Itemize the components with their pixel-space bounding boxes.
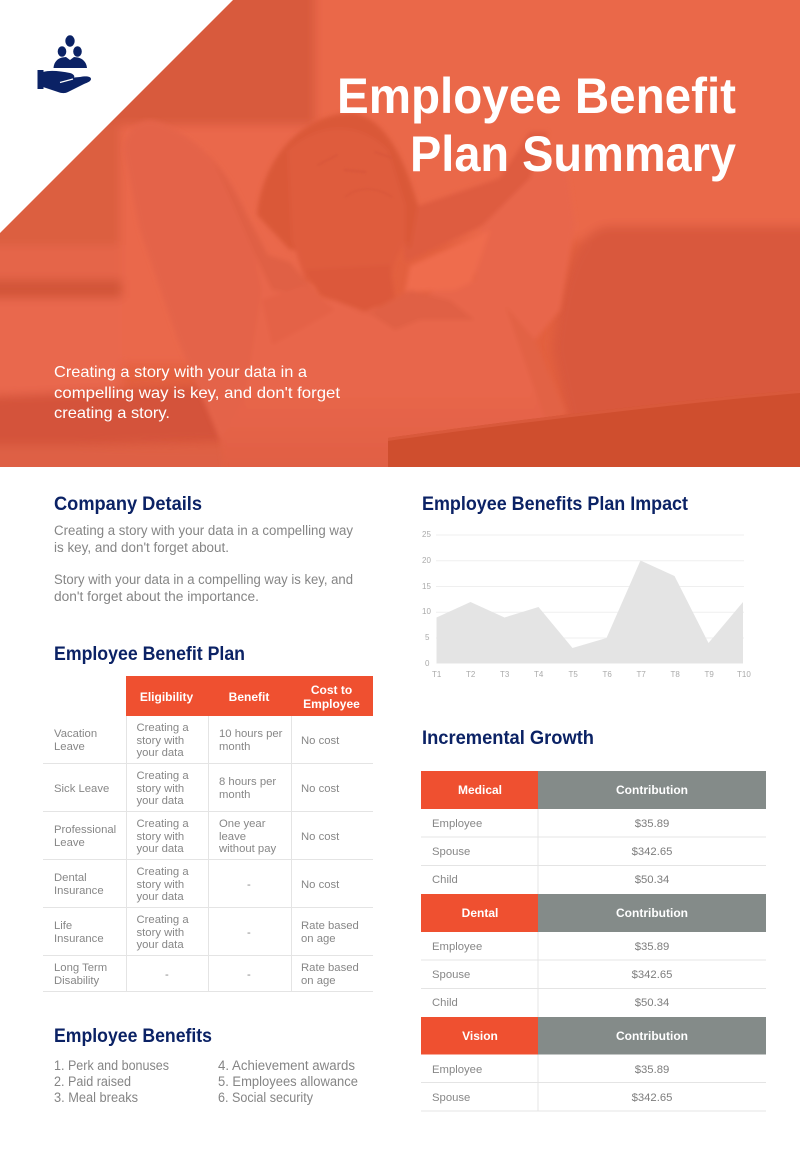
section: dental: Employee <box>432 941 482 953</box>
row: long term disability: Long Term <box>54 962 107 974</box>
section: vision: $35.89 <box>635 1064 669 1076</box>
company details text <box>54 523 353 604</box>
company details text: is key, and don't forget about. <box>54 540 229 555</box>
row: dental insurance: Creating a <box>136 866 189 878</box>
section: medical <box>421 771 766 886</box>
hero photo panel <box>0 0 800 490</box>
area chart: 15 <box>422 582 431 591</box>
row: vacation leave: No cost <box>301 735 340 747</box>
row: dental insurance: story with <box>136 879 184 891</box>
section: vision: $342.65 <box>632 1092 672 1104</box>
area chart: 0 <box>425 659 430 668</box>
section: medical: Medical <box>458 783 502 797</box>
row: professional leave: Creating a <box>136 818 189 830</box>
face <box>298 222 400 281</box>
area chart: T4 <box>534 670 544 679</box>
table: benefit plan: Employee <box>303 697 360 711</box>
benefits list <box>54 1058 358 1105</box>
row: life insurance: Rate based <box>301 920 359 932</box>
row: sick leave: Creating a <box>136 770 189 782</box>
row: professional leave <box>54 818 340 855</box>
benefits list: 3. Meal breaks <box>54 1090 138 1105</box>
area chart: T9 <box>704 670 714 679</box>
section: dental <box>421 894 766 1009</box>
table: benefit plan <box>43 676 373 992</box>
row: sick leave: your data <box>136 795 184 807</box>
area chart: T10 <box>737 670 751 679</box>
area chart: T3 <box>500 670 510 679</box>
intro text: creating a story. <box>54 405 170 422</box>
area chart: 10 <box>422 607 431 616</box>
area chart: T6 <box>602 670 612 679</box>
row: life insurance: Insurance <box>54 933 104 945</box>
row: professional leave: Leave <box>54 837 85 849</box>
area chart: 20 <box>422 556 431 565</box>
benefits list: 6. Social security <box>218 1090 313 1105</box>
heading: plan impact: Employee Benefits Plan Impact <box>422 494 689 515</box>
row: professional leave: leave <box>219 831 246 843</box>
row: sick leave: No cost <box>301 783 340 795</box>
sweater torso and arms <box>222 240 570 447</box>
table: benefit plan: Benefit <box>229 690 269 704</box>
table: benefit plan: Eligibility <box>140 690 193 704</box>
row: long term disability: - <box>165 969 169 981</box>
row: professional leave: your data <box>136 843 184 855</box>
section: medical: Child <box>432 874 458 886</box>
row: dental insurance: Insurance <box>54 885 104 897</box>
row: dental insurance: No cost <box>301 879 340 891</box>
benefits list: 2. Paid raised <box>54 1074 131 1089</box>
heading: employee benefits: Employee Benefits <box>54 1026 212 1047</box>
section: medical: $50.34 <box>635 874 669 886</box>
area chart: T7 <box>636 670 646 679</box>
row: professional leave: No cost <box>301 831 340 843</box>
row: sick leave: story with <box>136 783 184 795</box>
row: life insurance: - <box>247 927 251 939</box>
row: long term disability: - <box>247 969 251 981</box>
intro text: Creating a story with your data in a <box>54 364 307 381</box>
intro text <box>54 364 341 422</box>
row: sick leave: Sick Leave <box>54 783 109 795</box>
row: vacation leave: month <box>219 741 250 753</box>
area chart <box>422 530 751 679</box>
row: vacation leave <box>54 722 340 759</box>
row: long term disability: on age <box>301 975 336 987</box>
section: dental: Child <box>432 997 458 1009</box>
heading: incremental growth: Incremental Growth <box>422 728 594 749</box>
row: long term disability: Disability <box>54 975 100 987</box>
neck <box>320 292 371 312</box>
row: life insurance: Creating a <box>136 914 189 926</box>
table: incremental growth <box>421 771 766 1111</box>
area chart: T1 <box>432 670 442 679</box>
row: sick leave <box>54 770 340 807</box>
row: life insurance: Life <box>54 920 72 932</box>
row: sick leave: month <box>219 789 250 801</box>
benefits list: 1. Perk and bonuses <box>54 1058 169 1073</box>
heading: employee benefit plan: Employee Benefit Plan <box>54 644 245 665</box>
section: vision: Contribution <box>616 1029 688 1043</box>
row: vacation leave: Vacation <box>54 728 97 740</box>
row: long term disability <box>54 962 359 987</box>
section: medical: Contribution <box>616 783 688 797</box>
row: professional leave: One year <box>219 818 266 830</box>
collar <box>401 299 430 310</box>
row: long term disability: Rate based <box>301 962 359 974</box>
section: dental: $50.34 <box>635 997 669 1009</box>
section: medical: $35.89 <box>635 818 669 830</box>
intro text: compelling way is key, and don't forget <box>54 385 341 402</box>
section: dental: Contribution <box>616 906 688 920</box>
area chart: T2 <box>466 670 476 679</box>
row: professional leave: Professional <box>54 824 116 836</box>
company details text: Creating a story with your data in a compelling way <box>54 523 353 538</box>
row: life insurance <box>54 914 359 951</box>
white corner triangle <box>0 0 233 233</box>
section: vision: Vision <box>462 1029 498 1043</box>
forearm behind head <box>252 231 303 289</box>
section: vision: Spouse <box>432 1092 470 1104</box>
row: dental insurance <box>54 866 340 903</box>
row: vacation leave: Creating a <box>136 722 189 734</box>
title <box>337 68 736 182</box>
row: dental insurance: - <box>247 879 251 891</box>
row: dental insurance: your data <box>136 891 184 903</box>
row: professional leave: story with <box>136 831 184 843</box>
section: dental: Dental <box>462 906 498 920</box>
row: life insurance: story with <box>136 927 184 939</box>
title: Plan Summary <box>410 126 736 182</box>
row: vacation leave: story with <box>136 735 184 747</box>
row: vacation leave: your data <box>136 747 184 759</box>
row: sick leave: 8 hours per <box>219 776 276 788</box>
section: medical: $342.65 <box>632 846 672 858</box>
row: dental insurance: Dental <box>54 872 87 884</box>
section: medical: Employee <box>432 818 482 830</box>
row: life insurance: your data <box>136 939 184 951</box>
row: vacation leave: 10 hours per <box>219 728 283 740</box>
section: dental: $35.89 <box>635 941 669 953</box>
area chart: 25 <box>422 530 431 539</box>
title: Employee Benefit <box>337 68 736 124</box>
benefits list: 4. Achievement awards <box>218 1058 355 1073</box>
table: benefit plan: Cost to <box>311 683 352 697</box>
company details text: Story with your data in a compelling way is key, and <box>54 572 353 587</box>
section: dental: Spouse <box>432 969 470 981</box>
row: life insurance: on age <box>301 933 336 945</box>
section: dental: $342.65 <box>632 969 672 981</box>
company details text: don't forget about the importance. <box>54 589 259 604</box>
area chart: 5 <box>425 633 430 642</box>
section: vision: Employee <box>432 1064 482 1076</box>
section: vision <box>421 1017 766 1104</box>
benefits list: 5. Employees allowance <box>218 1074 358 1089</box>
heading: company details: Company Details <box>54 494 202 515</box>
hair <box>257 113 418 250</box>
area chart: T5 <box>568 670 578 679</box>
icon: people on hand <box>38 35 91 93</box>
area chart: T8 <box>670 670 680 679</box>
section: medical: Spouse <box>432 846 470 858</box>
row: vacation leave: Leave <box>54 741 85 753</box>
row: professional leave: without pay <box>218 843 276 855</box>
